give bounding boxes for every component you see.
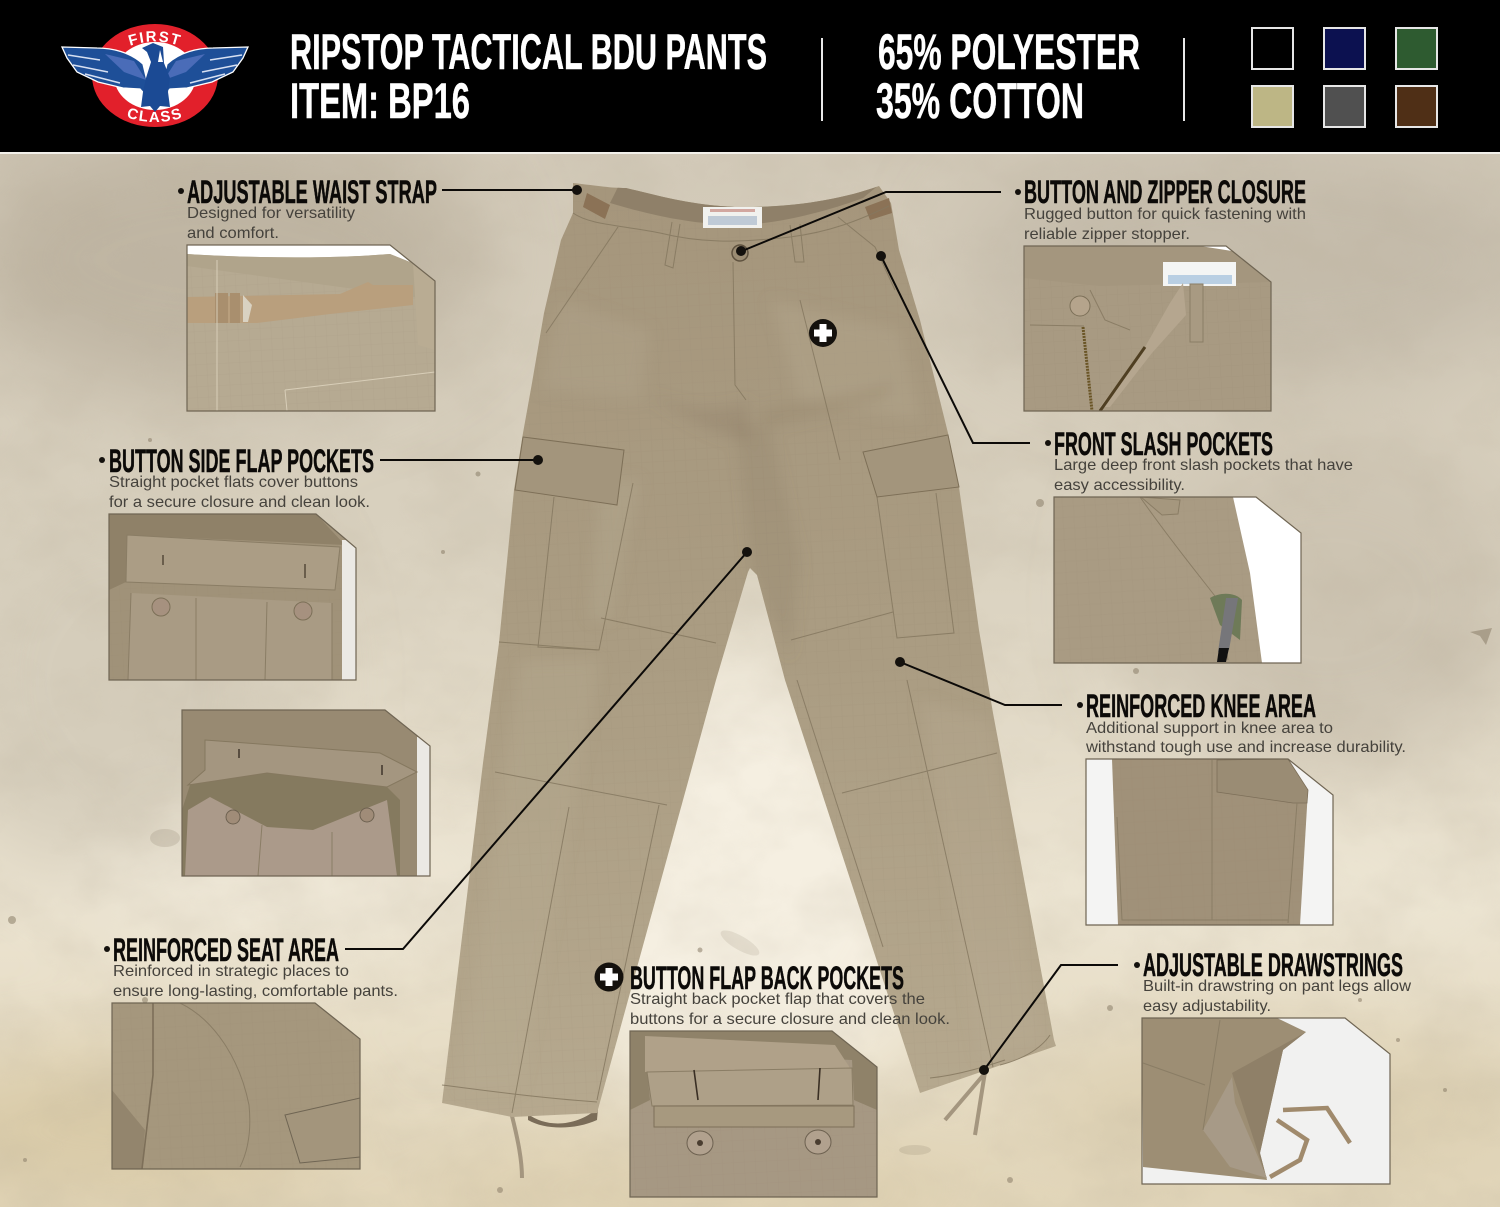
callout: button side flap pockets: for a secure closure and clean look. [109,494,370,511]
callout: front slash pockets [1045,426,1353,663]
First Class eagle logo: FIRST [128,31,182,46]
callout: reinforced knee area: withstand tough use and increase durability. [1085,739,1406,756]
waist label [703,207,762,228]
callout: reinforced seat area [104,932,398,1169]
thumbnail: slash pocket [1054,497,1304,663]
left pocket flap [515,437,624,505]
thumbnail: waist strap [187,245,437,411]
colour swatches [1252,28,1437,127]
callout: reinforced knee area: Additional support in knee area to [1086,720,1333,737]
callout: front slash pockets: easy accessibility. [1054,477,1185,494]
fabric composition: 35% COTTON [876,73,1084,129]
waist strap tabs [583,193,892,220]
callout: reinforced knee area [1077,688,1406,925]
callout: button side flap pockets [99,443,374,680]
callout: adjustable drawstrings [1134,947,1411,1184]
fabric composition [876,24,1140,129]
thumbnail: zipper [1024,246,1274,412]
fabric folds [706,412,755,446]
thumbnail: knee [1086,759,1336,925]
fabric composition: 65% POLYESTER [878,24,1140,80]
callout: button flap back pockets: BUTTON FLAP BACK POCKETS [630,960,904,996]
callout: button and zipper closure: reliable zipper stopper. [1024,226,1190,243]
callout: adjustable drawstrings: easy adjustability. [1143,998,1271,1015]
callout: reinforced seat area: ensure long-lasting, comfortable pants. [113,983,398,1000]
callout: reinforced seat area: Reinforced in strategic places to [113,963,349,980]
callout: adjustable waist strap: Designed for versatility [187,205,355,222]
title text [290,24,767,129]
callout: button and zipper closure [1015,174,1306,412]
callout: button side flap pockets: BUTTON SIDE FLAP POCKETS [109,443,374,479]
header bar [0,0,1500,154]
callout: adjustable drawstrings: Built-in drawstring on pant legs allow [1143,978,1411,995]
icon: plus [594,962,624,992]
callout: adjustable waist strap [178,174,437,411]
First Class eagle logo: CLASS [128,108,181,122]
First Class eagle logo [61,24,249,127]
callout: front slash pockets: Large deep front slash pockets that have [1054,457,1353,474]
callout: adjustable waist strap: ADJUSTABLE WAIST STRAP [187,174,437,210]
thumbnail: back pockets [630,1031,880,1197]
callout: front slash pockets: FRONT SLASH POCKETS [1054,426,1273,462]
left pocket [538,483,633,650]
inner waist [610,187,876,224]
callout leader lines [345,185,1118,1075]
icon: plus on pants front [809,319,837,347]
title text: ITEM: BP16 [290,73,470,129]
waist button [732,245,748,261]
callout: reinforced seat area: REINFORCED SEAT AREA [113,932,339,968]
callout: button flap back pockets [594,960,950,1197]
right pocket flap [863,435,959,497]
pants photo [430,170,1070,1178]
seams [442,206,1050,1113]
right pocket [877,493,954,638]
callout: button side flap pockets: Straight pocket flats cover buttons [109,474,358,491]
thumbnail: side flap [109,514,359,680]
title text: RIPSTOP TACTICAL BDU PANTS [290,24,767,80]
thumbnail: seat [112,1003,362,1169]
thumbnail: drawstring [1142,1018,1392,1184]
callout: button and zipper closure: Rugged button for quick fastening with [1024,206,1306,223]
callout: reinforced knee area: REINFORCED KNEE AREA [1086,688,1316,724]
callout: button flap back pockets: buttons for a secure closure and clean look. [630,1011,950,1028]
thumbnail: open flap pocket [182,710,432,876]
callout: button flap back pockets: Straight back pocket flap that covers the [630,991,925,1008]
callout: adjustable waist strap: and comfort. [187,225,279,242]
